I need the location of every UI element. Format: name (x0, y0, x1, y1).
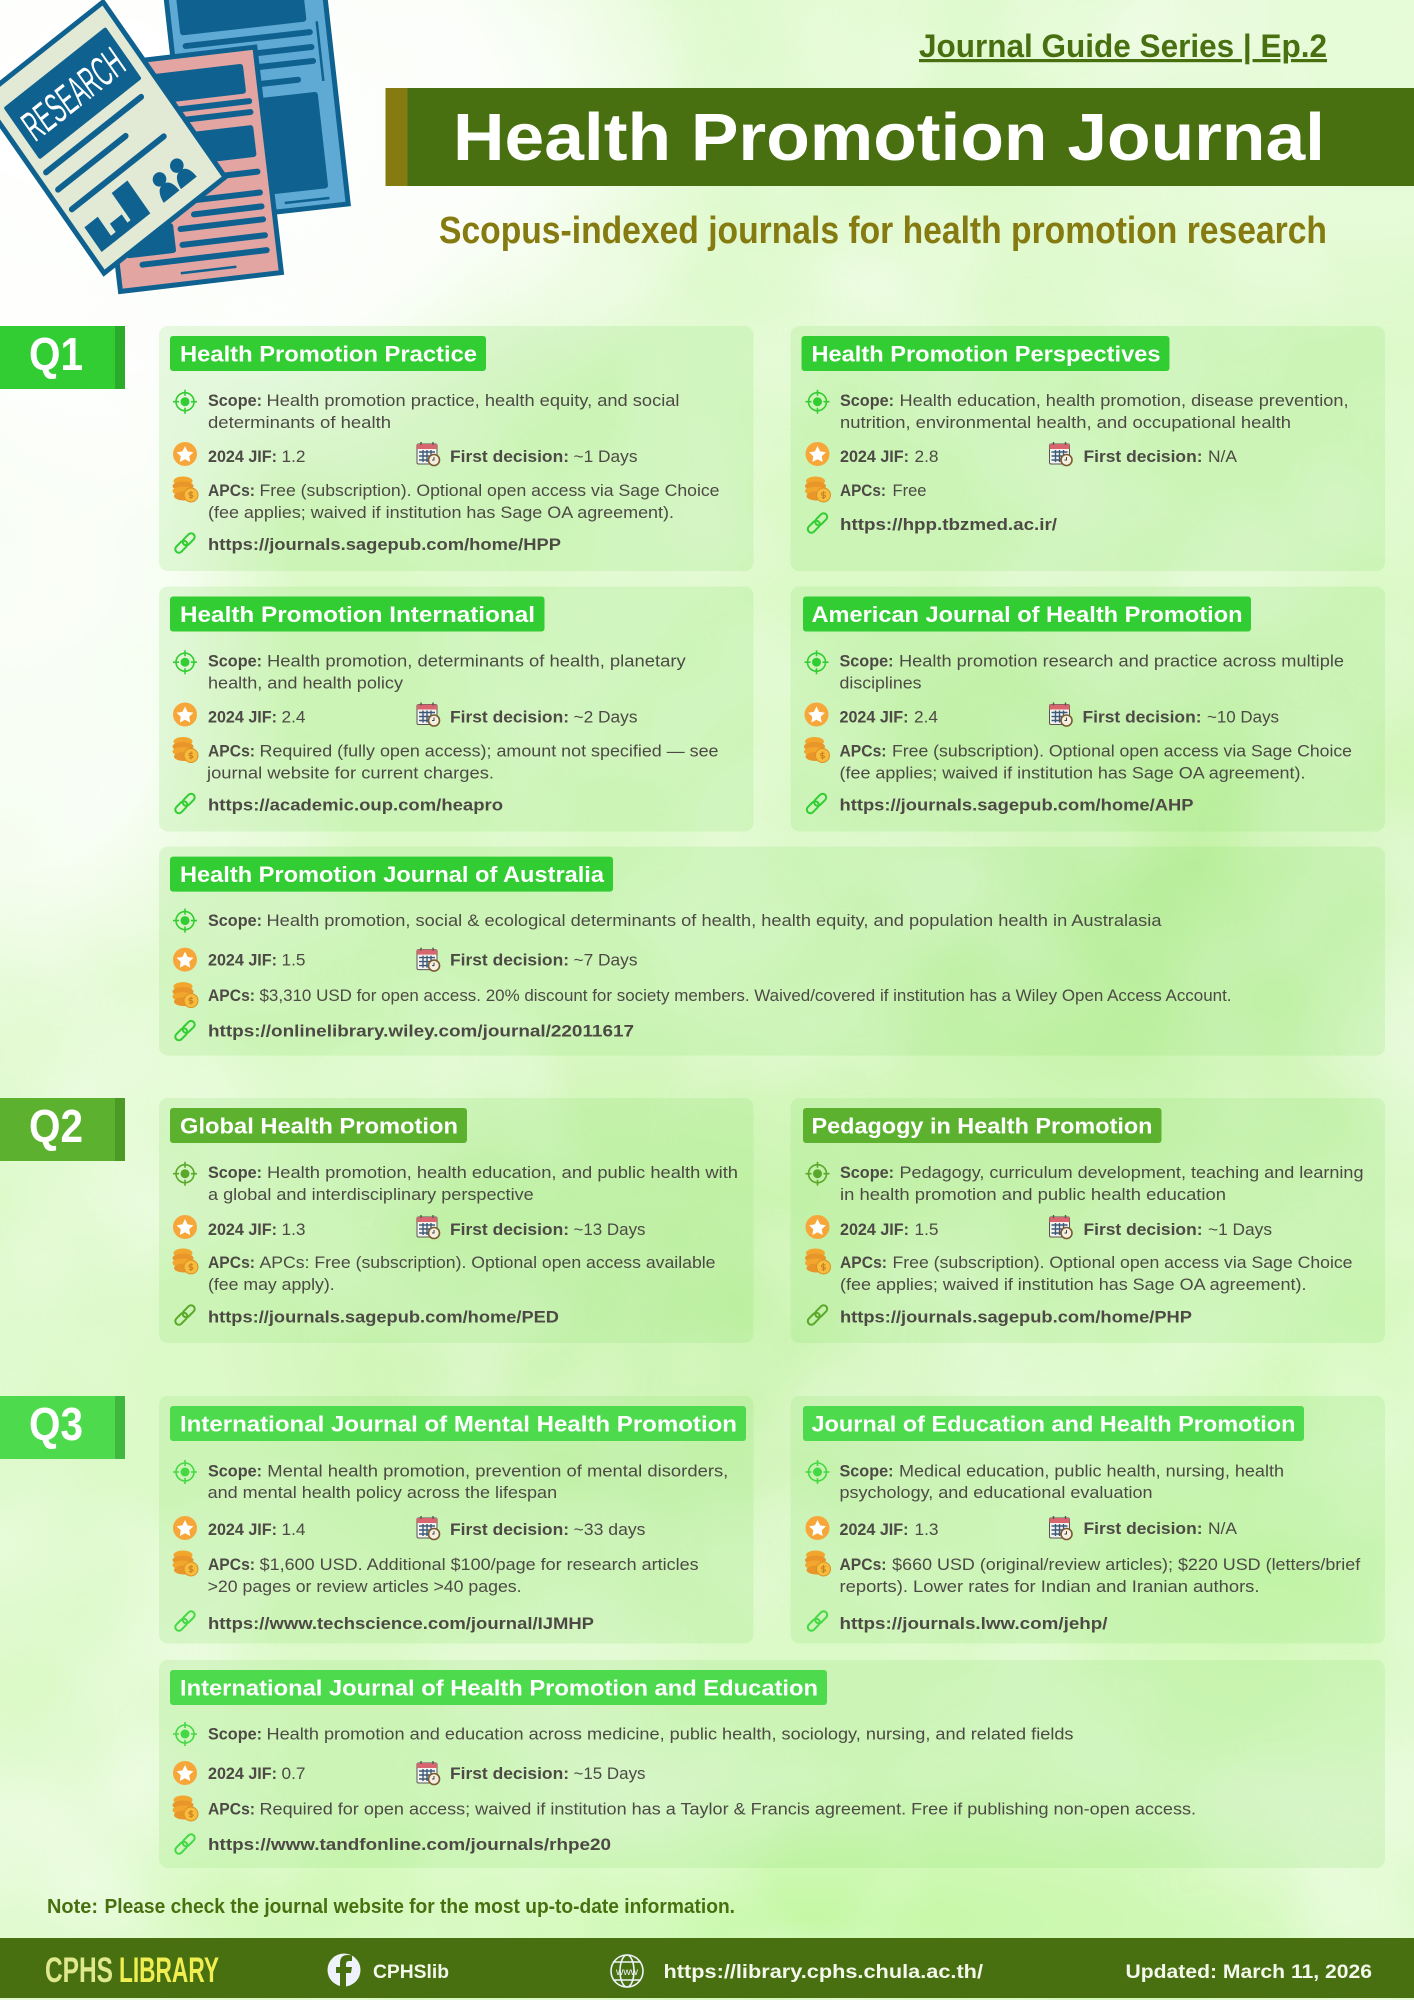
panel: Health Promotion Journal of Australia (159, 847, 1385, 1056)
APCs: Free (892, 481, 926, 500)
journal title (170, 857, 613, 892)
impact factor: 2024 JIF: (208, 1220, 277, 1239)
first decision: ~1 Days (574, 447, 638, 466)
first decision (417, 948, 638, 971)
APCs (805, 476, 926, 502)
note: Please check the journal website for the most up-to-date information. (104, 1896, 735, 1918)
impact factor: 2024 JIF: (840, 708, 908, 726)
series label: Journal Guide Series | Ep.2 (919, 28, 1327, 64)
scope (806, 390, 1348, 432)
scope (173, 650, 686, 692)
APCs (804, 737, 1352, 782)
first decision: ~33 days (574, 1520, 646, 1539)
APCs: (fee applies; waived if institution has Sage OA agreement). (840, 764, 1306, 782)
footer updated date: Updated: March 11, 2026 (1126, 1962, 1372, 1983)
footer facebook handle: CPHSlib (373, 1962, 449, 1983)
scope: Mental health promotion, prevention of mental disorders, (267, 1462, 728, 1481)
scope: Health promotion research and practice across multiple (899, 652, 1344, 670)
impact factor (806, 442, 938, 466)
scope: Scope: (208, 1724, 262, 1744)
panel: Health Promotion Practice (159, 326, 754, 571)
scope (173, 1162, 738, 1204)
APCs (805, 1550, 1360, 1596)
link: https://journals.sagepub.com/home/PHP (840, 1308, 1192, 1326)
icon: globe (611, 1955, 643, 1987)
panel: International Journal of Health Promotion and Education (159, 1660, 1385, 1868)
scope: psychology, and educational evaluation (840, 1483, 1152, 1502)
APCs: journal website for current charges. (206, 764, 494, 782)
first decision: ~15 Days (574, 1764, 646, 1783)
first decision: First decision: (450, 1220, 569, 1239)
impact factor: 1.5 (914, 1220, 938, 1239)
scope: Health promotion, determinants of health, planetary (267, 652, 686, 670)
APCs: $660 USD (original/review articles); $220 USD (letters/brief (892, 1555, 1360, 1574)
scope (804, 650, 1344, 692)
first decision (417, 442, 638, 466)
impact factor (173, 1761, 306, 1785)
link: https://journals.lww.com/jehp/ (840, 1614, 1108, 1633)
scope: Scope: (208, 1462, 262, 1481)
impact factor: 2024 JIF: (208, 951, 277, 970)
APCs: Required for open access; waived if institution has a Taylor & Francis agreement. Free if publishing non-open access. (260, 1800, 1196, 1818)
link: https://hpp.tbzmed.ac.ir/ (840, 515, 1057, 534)
first decision: First decision: (450, 708, 569, 726)
impact factor (173, 1516, 306, 1540)
impact factor: 2024 JIF: (208, 1520, 277, 1539)
APCs: APCs: (208, 1253, 255, 1272)
scope: Scope: (840, 391, 894, 410)
APCs: APCs: (208, 1555, 255, 1574)
scope: Scope: (208, 1163, 262, 1182)
first decision: First decision: (450, 951, 569, 970)
journal title: American Journal of Health Promotion (812, 602, 1242, 627)
tag: Q2: Q2 (29, 1100, 83, 1152)
APCs (172, 737, 718, 782)
scope (806, 1162, 1364, 1204)
title banner: Health Promotion Journal (453, 100, 1325, 175)
scope (173, 909, 1162, 933)
impact factor (173, 442, 306, 466)
impact factor: 1.3 (282, 1220, 306, 1239)
journal title: Health Promotion Practice (180, 342, 477, 366)
first decision (417, 1215, 646, 1239)
first decision: First decision: (450, 447, 569, 466)
scope: Health promotion and education across medicine, public health, sociology, nursing, and related fields (266, 1724, 1074, 1744)
scope: Scope: (840, 1163, 894, 1182)
journal title (170, 1670, 827, 1705)
scope: nutrition, environmental health, and occupational health (840, 413, 1291, 432)
panel: International Journal of Mental Health Promotion (159, 1396, 754, 1644)
impact factor: 2.4 (914, 708, 938, 726)
first decision: First decision: (450, 1520, 569, 1539)
first decision (417, 702, 638, 726)
impact factor: 2024 JIF: (840, 447, 909, 466)
first decision: N/A (1208, 447, 1238, 466)
journal title: Health Promotion Journal of Australia (180, 862, 605, 887)
impact factor: 1.4 (282, 1520, 306, 1539)
scope: determinants of health (208, 413, 391, 432)
footer logo: LIBRARY (119, 1951, 219, 1990)
journal title (170, 336, 486, 371)
scope: Scope: (208, 652, 262, 670)
journal title (170, 1108, 467, 1143)
scope: Health promotion, health education, and public health with (267, 1163, 738, 1182)
APCs: APCs: (208, 986, 255, 1005)
blue sheet (165, 0, 348, 222)
impact factor: 2024 JIF: (208, 1764, 277, 1783)
journal title (803, 596, 1251, 632)
APCs: >20 pages or review articles >40 pages. (208, 1577, 522, 1596)
scope: in health promotion and public health education (840, 1185, 1226, 1204)
link: https://academic.oup.com/heapro (208, 796, 503, 814)
scope (173, 1460, 728, 1502)
APCs (805, 1248, 1352, 1294)
impact factor: 2.8 (914, 447, 938, 466)
illustration: research papers (0, 0, 348, 291)
panel: Journal of Education and Health Promotion (790, 1396, 1385, 1644)
impact factor (173, 702, 306, 726)
scope: Scope: (840, 652, 894, 670)
tag: Q1: Q1 (29, 328, 83, 380)
icon: globe: www (615, 1967, 639, 1978)
scope: Pedagogy, curriculum development, teaching and learning (900, 1163, 1364, 1182)
scope: Health promotion practice, health equity, and social (266, 391, 680, 410)
journal title: Journal of Education and Health Promotion (812, 1412, 1296, 1436)
panel: Health Promotion International (159, 586, 754, 832)
impact factor: 2024 JIF: (840, 1520, 908, 1539)
impact factor (173, 1215, 306, 1239)
journal title: International Journal of Mental Health Promotion (180, 1412, 737, 1436)
first decision: First decision: (1084, 1519, 1202, 1538)
title banner (386, 88, 1414, 186)
APCs (172, 1248, 716, 1294)
APCs: (fee may apply). (208, 1275, 335, 1294)
impact factor: 2024 JIF: (208, 447, 277, 466)
journal title: International Journal of Health Promotion and Education (180, 1676, 818, 1700)
scope (173, 1722, 1074, 1746)
panel: Global Health Promotion (159, 1098, 754, 1343)
APCs: APCs: (208, 481, 255, 500)
scope: a global and interdisciplinary perspective (208, 1185, 534, 1204)
first decision: ~2 Days (574, 708, 638, 726)
APCs: APCs: (840, 1253, 887, 1272)
link: https://journals.sagepub.com/home/PED (208, 1308, 559, 1326)
APCs: $3,310 USD for open access. 20% discount for society members. Waived/covered if institution has a Wiley Open Access Account. (260, 986, 1232, 1005)
link (806, 1610, 1108, 1633)
APCs: Free (subscription). Optional open access via Sage Choice (892, 742, 1352, 760)
impact factor: 1.3 (914, 1520, 938, 1539)
APCs: (fee applies; waived if institution has Sage OA agreement). (840, 1275, 1306, 1294)
impact factor (806, 1215, 938, 1239)
scope: Medical education, public health, nursing, health (899, 1462, 1284, 1481)
link: https://journals.sagepub.com/home/HPP (208, 535, 561, 554)
first decision: First decision: (450, 1764, 569, 1783)
scope: Health promotion, social & ecological determinants of health, health equity, and population health in Australasia (266, 911, 1162, 930)
link: https://www.tandfonline.com/journals/rhpe20 (208, 1835, 611, 1854)
panel: American Journal of Health Promotion (790, 586, 1385, 832)
impact factor: 2024 JIF: (840, 1220, 909, 1239)
panel: Health Promotion Perspectives (790, 326, 1385, 571)
APCs: APCs: (840, 742, 886, 760)
journal title: Health Promotion International (180, 602, 535, 627)
first decision (417, 1761, 646, 1784)
APCs: Required (fully open access); amount not specified — see (260, 742, 718, 760)
APCs: APCs: (208, 742, 255, 760)
first decision: ~10 Days (1207, 708, 1279, 726)
journal title (803, 1406, 1304, 1441)
tag: Q3 (0, 1396, 125, 1459)
icon: facebook (328, 1954, 360, 1987)
note: Note: (47, 1896, 98, 1918)
footer bar (0, 1938, 1414, 1998)
impact factor: 1.5 (282, 951, 306, 970)
APCs (172, 1550, 699, 1596)
scope (173, 390, 680, 432)
journal title: Global Health Promotion (180, 1114, 458, 1138)
subtitle: Scopus-indexed journals for health promotion research (439, 210, 1327, 252)
scope: health, and health policy (208, 674, 404, 692)
APCs: (fee applies; waived if institution has Sage OA agreement). (208, 503, 674, 522)
panel: Pedagogy in Health Promotion (790, 1098, 1385, 1343)
impact factor: 2024 JIF: (208, 708, 277, 726)
APCs: APCs: (840, 1555, 886, 1574)
impact factor (804, 702, 938, 726)
scope: disciplines (840, 674, 922, 692)
journal title: Health Promotion Perspectives (812, 342, 1160, 366)
footer logo (45, 1951, 219, 1990)
scope: Scope: (208, 911, 262, 930)
link: https://journals.sagepub.com/home/AHP (840, 796, 1194, 814)
APCs: reports). Lower rates for Indian and Iranian authors. (840, 1577, 1260, 1596)
front sheet (0, 2, 225, 273)
first decision (1050, 1516, 1238, 1540)
scope: Health education, health promotion, disease prevention, (900, 391, 1348, 410)
journal title (170, 596, 544, 632)
scope: Scope: (208, 391, 262, 410)
tag: Q1 (0, 326, 125, 389)
impact factor: 0.7 (282, 1764, 306, 1783)
impact factor: 1.2 (282, 447, 306, 466)
APCs: APCs: (208, 1800, 255, 1818)
first decision (1050, 1215, 1272, 1239)
link: https://onlinelibrary.wiley.com/journal/22011617 (208, 1022, 634, 1041)
APCs (172, 982, 1232, 1008)
tag: Q2 (0, 1098, 125, 1161)
footer logo: CPHS (45, 1951, 113, 1990)
first decision: First decision: (1082, 708, 1202, 726)
APCs: $1,600 USD. Additional $100/page for research articles (260, 1555, 699, 1574)
journal title: Pedagogy in Health Promotion (812, 1114, 1152, 1138)
pink sheet (94, 47, 281, 291)
first decision (1050, 442, 1238, 466)
first decision: ~13 Days (574, 1220, 646, 1239)
link (174, 792, 503, 815)
scope: Scope: (840, 1462, 894, 1481)
link (174, 1610, 594, 1633)
first decision: ~1 Days (1208, 1220, 1272, 1239)
link (806, 512, 1057, 534)
impact factor (806, 1516, 938, 1540)
journal title (802, 336, 1170, 371)
first decision: First decision: (1084, 447, 1202, 466)
APCs: Free (subscription). Optional open access via Sage Choice (892, 1253, 1352, 1272)
journal title (170, 1406, 746, 1441)
APCs: APCs: Free (subscription). Optional open access available (260, 1253, 716, 1272)
first decision: ~7 Days (574, 951, 638, 970)
first decision (1050, 702, 1279, 726)
APCs: APCs: (840, 481, 886, 500)
APCs (172, 476, 720, 522)
first decision: First decision: (1084, 1220, 1202, 1239)
first decision: N/A (1208, 1519, 1238, 1538)
tag: Q3: Q3 (29, 1398, 83, 1450)
first decision (417, 1516, 646, 1540)
footer website: https://library.cphs.chula.ac.th/ (664, 1962, 984, 1983)
APCs: Free (subscription). Optional open access via Sage Choice (260, 481, 720, 500)
journal title (803, 1108, 1162, 1143)
scope (806, 1460, 1284, 1502)
link: https://www.techscience.com/journal/IJMHP (208, 1614, 594, 1633)
impact factor: 2.4 (282, 708, 306, 726)
impact factor (173, 948, 306, 972)
scope: and mental health policy across the lifespan (208, 1483, 557, 1502)
APCs (172, 1796, 1196, 1821)
